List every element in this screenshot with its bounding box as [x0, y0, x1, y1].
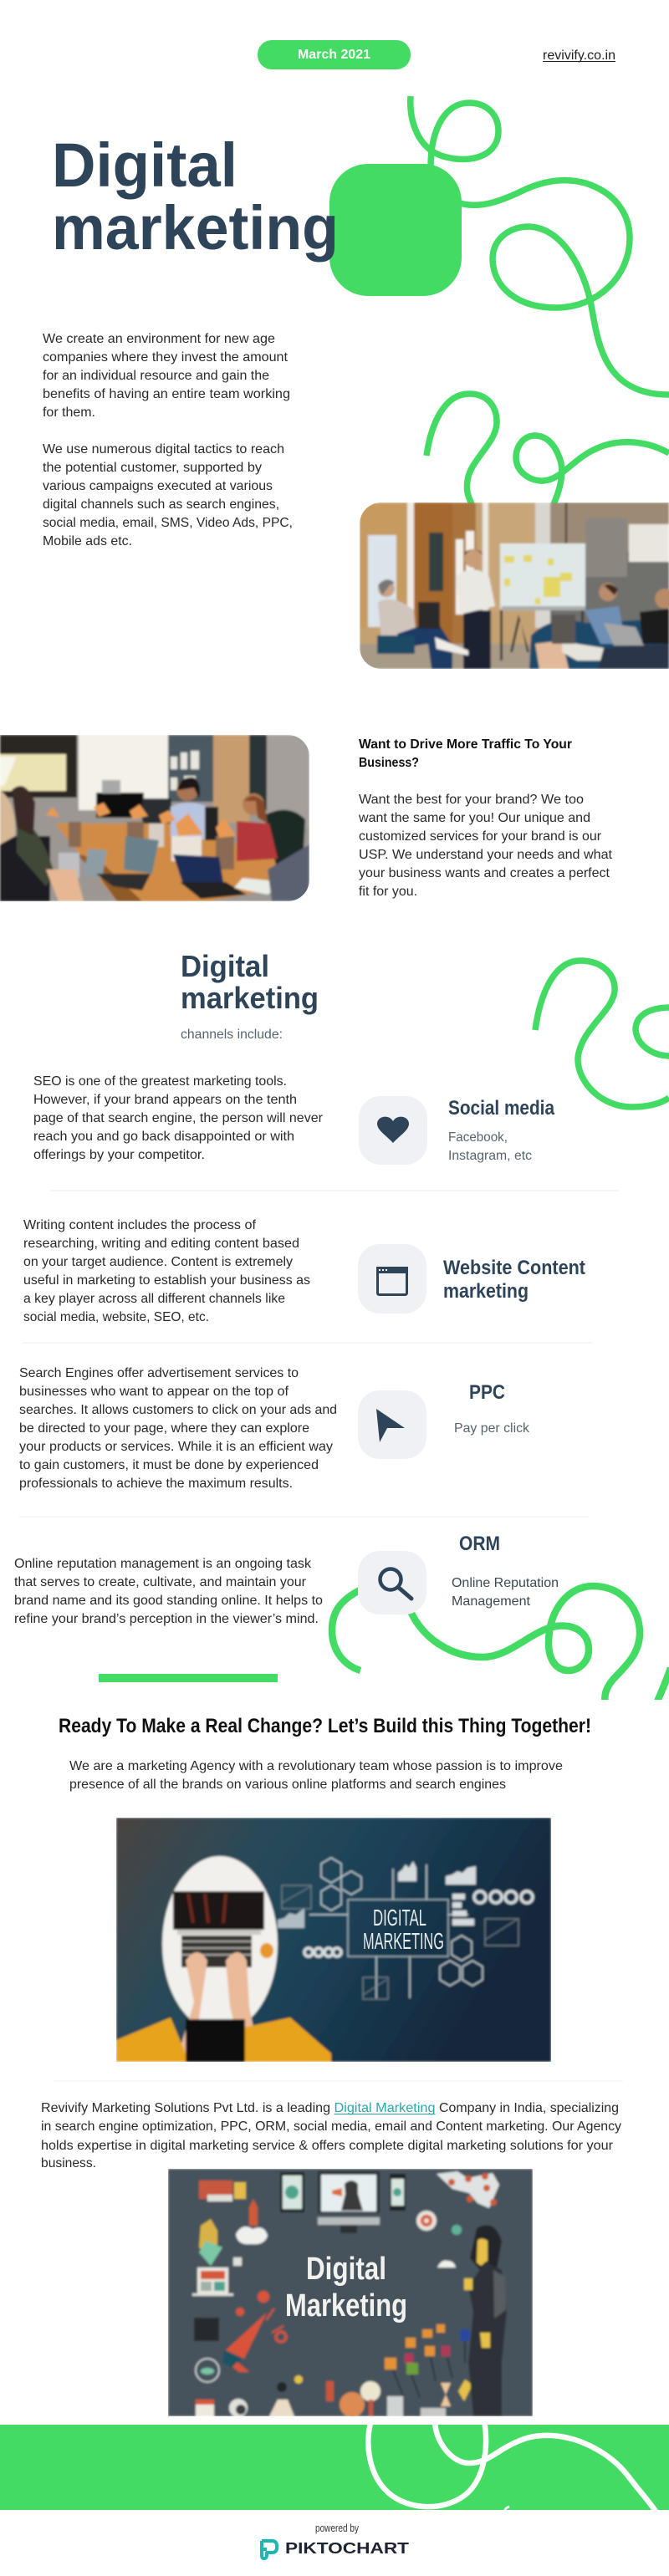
- green squiggle long right: [460, 181, 669, 395]
- company description: holds expertise in digital marketing service & offers complete digital marketing solutions for your: [41, 2139, 614, 2153]
- row: SEO description: offerings by your competitor.: [33, 1148, 205, 1162]
- row: PPC description: Search Engines offer advertisement services to: [19, 1366, 299, 1380]
- social media label: [448, 1097, 555, 1163]
- image: digital marketing illustration: Digital: [306, 2252, 386, 2287]
- call-to-action heading: Ready To Make a Real Change? Let’s Build this Thing Together!: [59, 1715, 591, 1737]
- website link: revivify.co.in: [543, 48, 615, 63]
- foreground left: [0, 836, 50, 901]
- date pill: [258, 40, 411, 69]
- icon: heart: [359, 1096, 427, 1165]
- row: ORM description: brand name and its good standing online. It helps to: [14, 1594, 323, 1608]
- laptops: [88, 849, 105, 878]
- row: content description: on your target audience. Content is extremely: [23, 1255, 293, 1269]
- row: PPC description: professionals to achieve the maximum results.: [19, 1477, 293, 1491]
- intro paragraph 2: social media, email, SMS, Video Ads, PPC,: [43, 516, 293, 530]
- green squiggle bottom of channels: [332, 1586, 669, 1706]
- megaphone: [226, 2313, 267, 2359]
- company description: [41, 2101, 621, 2170]
- agency description: [69, 1759, 563, 1792]
- company description: business.: [41, 2156, 96, 2170]
- row: content description: useful in marketing to establish your business as: [23, 1273, 310, 1288]
- ORM label: Management: [452, 1594, 531, 1609]
- text: want to drive more traffic: USP. We understand your needs and what: [359, 848, 613, 862]
- intro paragraph 2: We use numerous digital tactics to reach: [43, 442, 284, 457]
- row: PPC description: be directed to your page, where they can explore: [19, 1421, 309, 1436]
- green rounded square: [329, 164, 462, 296]
- intro paragraph 2: various campaigns executed at various: [43, 479, 273, 493]
- icon: magnifier: [358, 1551, 426, 1614]
- row: ORM description: refine your brand’s perception in the viewer’s mind.: [14, 1612, 319, 1626]
- table: [55, 824, 301, 901]
- gift bags: [69, 822, 234, 870]
- social media label: Facebook,: [448, 1130, 508, 1145]
- row: SEO description: However, if your brand appears on the tenth: [33, 1093, 297, 1107]
- row: PPC description: your products or services. While it is an efficient way: [19, 1440, 333, 1454]
- row: content description: social media, website, SEO, etc.: [23, 1310, 209, 1324]
- row: content description: a key player across all different channels like: [23, 1292, 285, 1306]
- title: Digital: [52, 130, 237, 200]
- social media label: Social media: [448, 1097, 555, 1120]
- website content label: [443, 1257, 585, 1303]
- row: content description: researching, writing and editing content based: [23, 1237, 299, 1251]
- laptop left: [197, 2267, 228, 2293]
- photo: team at whiteboard: [360, 502, 669, 669]
- social media label: Instagram, etc: [448, 1149, 532, 1163]
- intro paragraph 2: [43, 442, 293, 548]
- row: ORM description: Online reputation management is an ongoing task: [14, 1557, 312, 1571]
- text: want to drive more traffic: [358, 737, 613, 899]
- people right: [171, 803, 211, 840]
- PPC label: PPC: [469, 1381, 505, 1404]
- website content label: marketing: [443, 1280, 529, 1303]
- data graphics: [309, 1858, 483, 1998]
- briefcase: [194, 2318, 219, 2341]
- photo: laptop with digital marketing graphics: MARKETING: [363, 1928, 444, 1954]
- intro paragraph 1: for an individual resource and gain the: [43, 369, 269, 383]
- intro paragraph 1: for them.: [43, 406, 95, 420]
- icon: cursor: [358, 1390, 426, 1459]
- monitor with presenter: [318, 2171, 380, 2213]
- books and mug: [199, 2181, 232, 2199]
- icon: browser window: [358, 1244, 426, 1314]
- tablets and phone: [280, 2172, 304, 2212]
- text: want to drive more traffic: fit for you.: [359, 885, 417, 899]
- standing man: [463, 610, 491, 669]
- text: want to drive more traffic: your business wants and creates a perfect: [359, 866, 610, 880]
- whiteboard: [500, 543, 585, 609]
- target: [416, 2211, 437, 2231]
- money and rocket: [199, 2219, 217, 2256]
- title: [52, 130, 339, 263]
- agency description: presence of all the brands on various online platforms and search engines: [69, 1778, 506, 1792]
- text: want to drive more traffic: Want to Drive More Traffic To Your: [359, 737, 572, 752]
- green squiggle above photo: [426, 394, 669, 504]
- footer green band: [0, 2420, 669, 2512]
- image: digital marketing illustration: Marketing: [285, 2288, 407, 2324]
- row: PPC description: businesses who want to appear on the top of: [19, 1385, 289, 1399]
- photo: laptop with digital marketing graphics: DIGITAL: [373, 1905, 426, 1931]
- row: ORM description: [14, 1557, 323, 1626]
- green squiggle top loop: [411, 96, 498, 167]
- row: PPC description: [19, 1366, 337, 1491]
- text: want to drive more traffic: customized services for your brand is our: [359, 829, 602, 844]
- world map: [437, 2171, 499, 2208]
- eye target: [196, 2359, 219, 2382]
- row: SEO description: page of that search engine, the person will never: [33, 1111, 324, 1125]
- company description: Company in India, specializing: [439, 2101, 619, 2115]
- intro paragraph 1: [43, 332, 290, 420]
- heading: digital marketing channels: channels include:: [181, 1028, 283, 1042]
- company description: Digital Marketing: [334, 2101, 435, 2115]
- photo: laptop with digital marketing graphics: [116, 1818, 551, 2062]
- piktochart logo: [262, 2540, 409, 2558]
- sofa and right figures: [529, 619, 669, 669]
- powered by label: powered by: [315, 2522, 359, 2534]
- ORM label: Online Reputation: [452, 1576, 559, 1590]
- row: SEO description: [33, 1074, 324, 1162]
- row: SEO description: SEO is one of the greatest marketing tools.: [33, 1074, 287, 1089]
- heading: digital marketing channels: [181, 949, 319, 1042]
- heading: digital marketing channels: marketing: [181, 981, 319, 1015]
- intro paragraph 2: the potential customer, supported by: [43, 461, 262, 475]
- heading: digital marketing channels: Digital: [181, 949, 269, 983]
- bottom items: [196, 2400, 214, 2416]
- company description: Revivify Marketing Solutions Pvt Ltd. is a leading: [41, 2101, 330, 2115]
- row: ORM description: that serves to create, cultivate, and maintain your: [14, 1575, 307, 1589]
- website content label: Website Content: [443, 1257, 585, 1279]
- person: [470, 2225, 502, 2270]
- ORM label: [452, 1533, 559, 1609]
- row: SEO description: reach you and go back disappointed or with: [33, 1130, 294, 1144]
- photo: conference table: [0, 735, 309, 901]
- green bar: [99, 1674, 278, 1682]
- intro paragraph 2: Mobile ads etc.: [43, 534, 132, 548]
- title: marketing: [52, 193, 339, 263]
- row: PPC description: searches. It allows customers to click on your ads and: [19, 1403, 337, 1417]
- image: digital marketing illustration: [168, 2169, 533, 2417]
- row: PPC description: to gain customers, it must be done by experienced: [19, 1458, 319, 1472]
- text: want to drive more traffic: Business?: [359, 756, 419, 770]
- text: want to drive more traffic: want the same for you! Our unique and: [358, 811, 590, 825]
- company description: in search engine optimization, PPC, ORM, social media, email and Content marketing. Our Agency: [41, 2119, 621, 2134]
- intro paragraph 2: digital channels such as search engines,: [43, 497, 279, 512]
- signs: [406, 2324, 445, 2348]
- ORM label: ORM: [459, 1533, 500, 1555]
- piktochart logo: PIKTOCHART: [285, 2540, 409, 2557]
- PPC label: [454, 1381, 530, 1436]
- date pill: March 2021: [298, 48, 370, 62]
- row: content description: Writing content includes the process of: [23, 1218, 257, 1232]
- PPC label: Pay per click: [454, 1421, 530, 1436]
- intro paragraph 1: benefits of having an entire team working: [43, 387, 290, 401]
- seated man left: [378, 599, 416, 640]
- text: want to drive more traffic: Want the best for your brand? We too: [359, 793, 584, 807]
- intro paragraph 1: companies where they invest the amount: [43, 350, 289, 365]
- green squiggle channels: [535, 961, 669, 1107]
- intro paragraph 1: We create an environment for new age: [43, 332, 275, 346]
- agency description: We are a marketing Agency with a revolutionary team whose passion is to improve: [69, 1759, 563, 1773]
- row: content description: [23, 1218, 310, 1324]
